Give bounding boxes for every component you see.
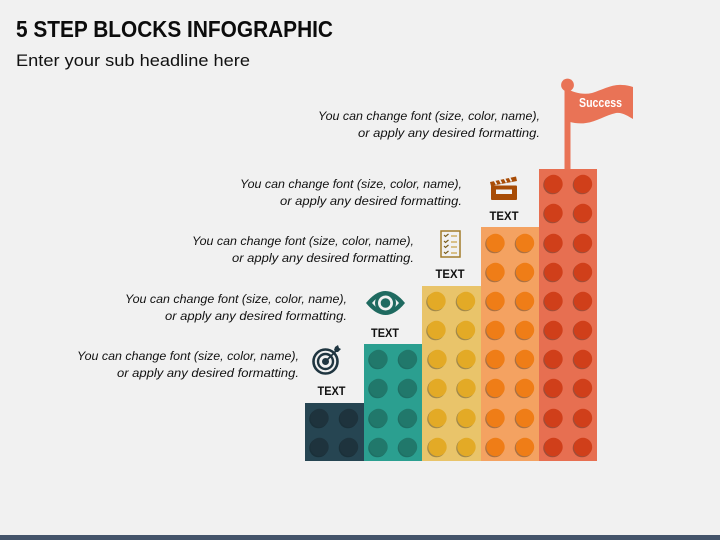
text block: step 2: or apply any desired formatting. [165, 309, 347, 323]
icon: clapperboard [490, 176, 517, 200]
text block: step 4: You can change font (size, color, name), [240, 177, 462, 191]
text block: step 5 [318, 109, 540, 140]
block: step 3 yellow [422, 286, 481, 461]
text block: step 4 [240, 177, 462, 208]
text block: step 3 [192, 234, 414, 265]
bottom bar [0, 535, 720, 540]
text block: step 2 [125, 292, 347, 323]
text block: step 2: You can change font (size, color, name), [125, 292, 347, 306]
text block: step 3: or apply any desired formatting. [232, 251, 414, 265]
label: step 4 TEXT: TEXT [490, 209, 519, 223]
label: step 2 TEXT: TEXT [371, 326, 400, 340]
block: step 5 red [539, 169, 597, 461]
icon: checklist [441, 231, 460, 257]
icon: target [314, 345, 341, 374]
block: step 1 navy [305, 403, 364, 461]
icon: eye [366, 291, 405, 315]
text block: step 4: or apply any desired formatting. [280, 194, 462, 208]
block: step 2 teal [364, 344, 422, 461]
label: step 1 TEXT: TEXT [318, 384, 346, 398]
text block: step 5: You can change font (size, color, name), [318, 109, 540, 123]
text block: step 1: You can change font (size, color, name), [77, 349, 299, 363]
subtitle: Enter your sub headline here [16, 51, 250, 70]
text block: step 1: or apply any desired formatting. [117, 366, 299, 380]
label: step 3 TEXT: TEXT [436, 267, 465, 281]
flag label: Success [579, 96, 622, 110]
text block: step 1 [77, 349, 299, 380]
text block: step 3: You can change font (size, color, name), [192, 234, 414, 248]
text block: step 5: or apply any desired formatting. [358, 126, 540, 140]
title: 5 STEP BLOCKS INFOGRAPHIC [16, 16, 333, 42]
flag with pole [561, 79, 633, 170]
block: step 4 orange [481, 227, 539, 461]
